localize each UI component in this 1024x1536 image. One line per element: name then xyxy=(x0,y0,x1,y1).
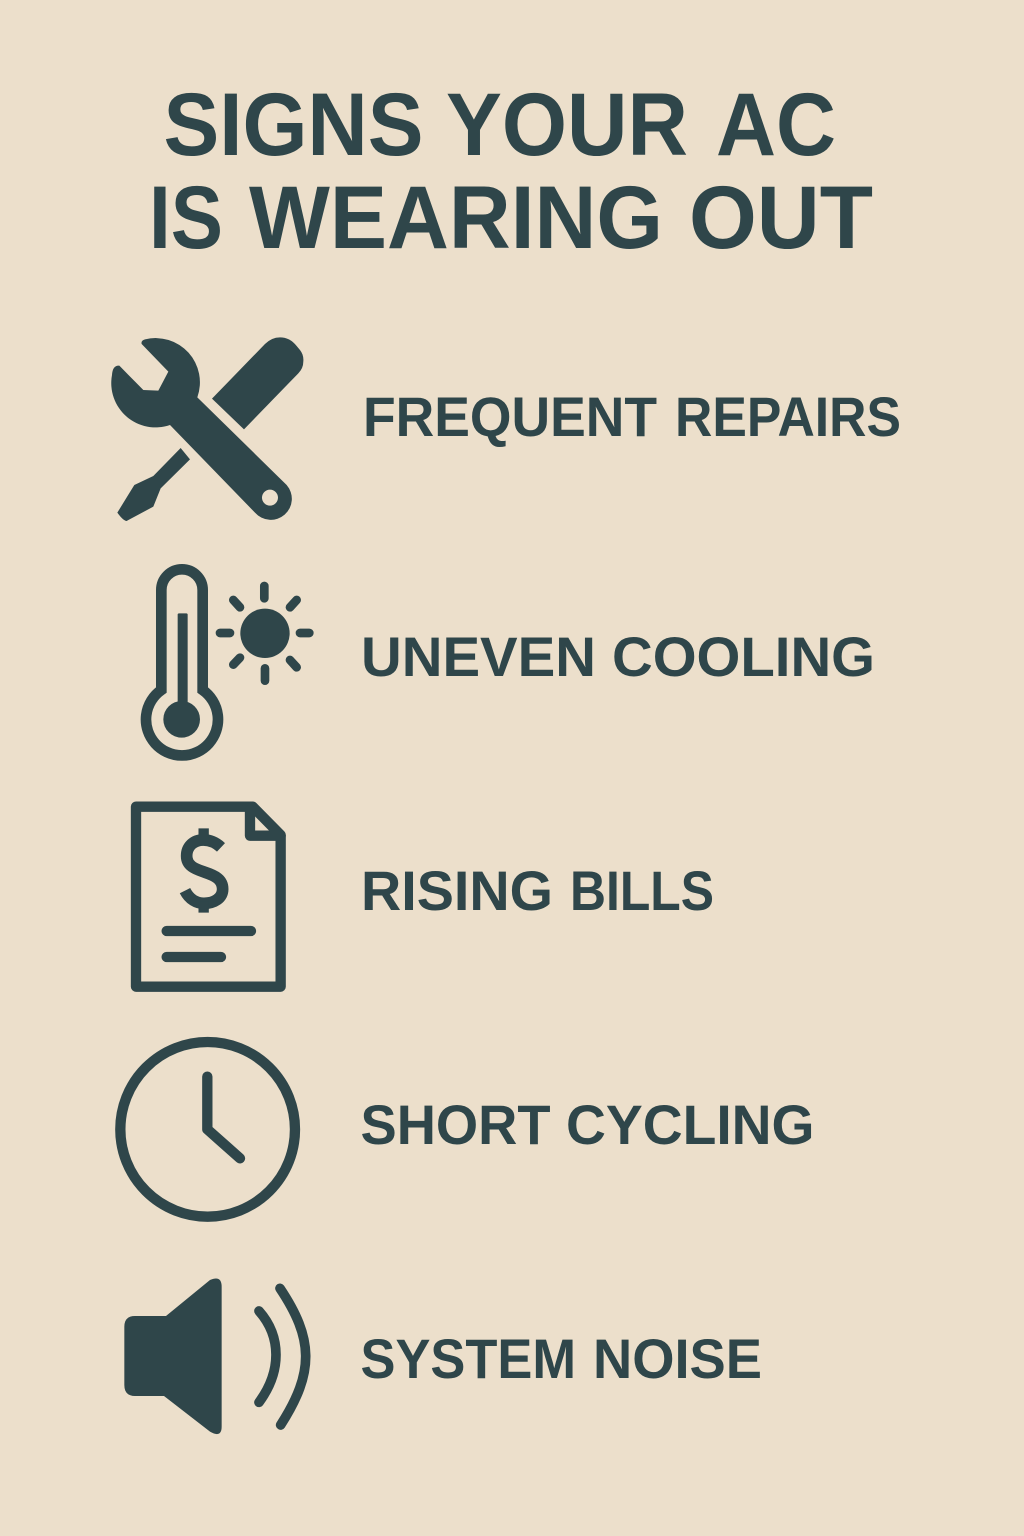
icon: bill with dollar sign xyxy=(136,807,281,987)
label: frequent repairs: REPAIRS xyxy=(675,385,901,448)
icon: thermometer and sun xyxy=(146,569,309,755)
icon: clock xyxy=(120,1042,295,1217)
row: system noise xyxy=(124,1278,762,1434)
label: short cycling: CYCLING xyxy=(566,1093,814,1156)
label: uneven cooling: COOLING xyxy=(612,625,875,688)
label: rising bills: RISING xyxy=(361,859,553,922)
label: frequent repairs: FREQUENT xyxy=(363,385,657,448)
row: short cycling xyxy=(120,1042,814,1217)
title: AC xyxy=(716,74,836,174)
row: rising bills xyxy=(136,807,714,987)
title: IS xyxy=(149,167,223,267)
row: uneven cooling xyxy=(146,569,875,755)
title xyxy=(149,74,873,267)
icon: speaker xyxy=(124,1278,306,1434)
row: frequent repairs xyxy=(111,337,901,521)
label: system noise: NOISE xyxy=(593,1327,762,1390)
title: YOUR xyxy=(446,74,688,174)
icon: wrench and screwdriver xyxy=(111,337,303,521)
label: system noise: SYSTEM xyxy=(360,1327,576,1390)
label: uneven cooling: UNEVEN xyxy=(361,625,596,688)
label: rising bills: BILLS xyxy=(570,859,714,922)
label: short cycling: SHORT xyxy=(360,1093,550,1156)
title: WEARING xyxy=(249,167,663,267)
title: OUT xyxy=(689,167,873,267)
title: SIGNS xyxy=(164,74,424,174)
